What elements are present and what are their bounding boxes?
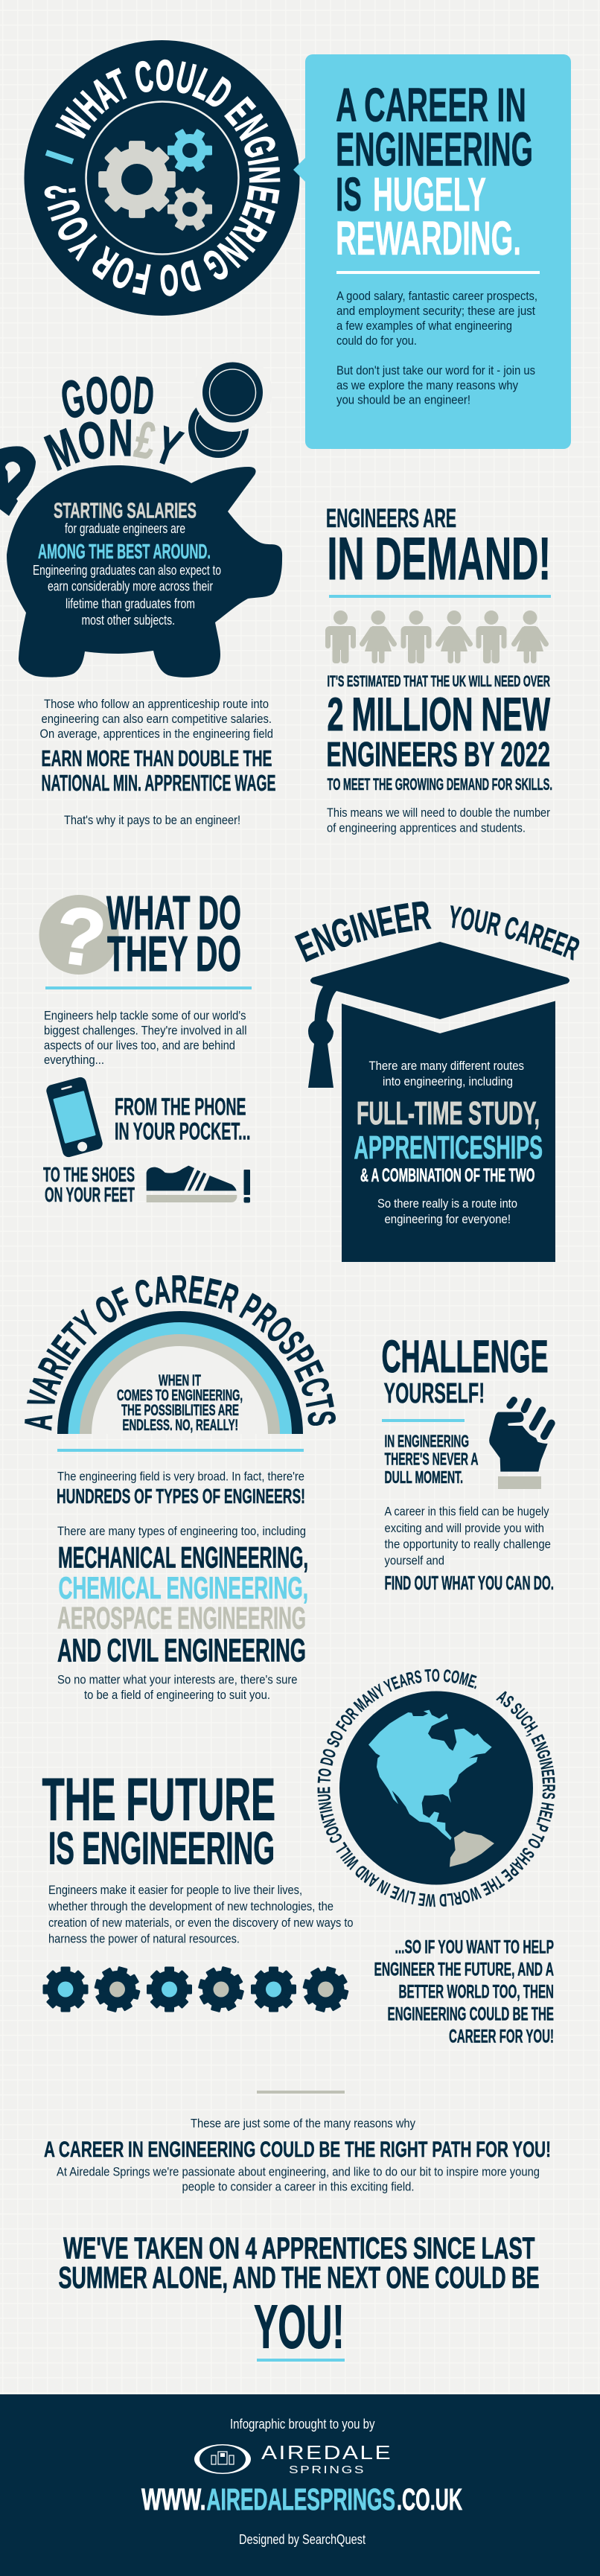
body text: [44, 1008, 247, 1067]
body text: yourself and: [384, 1553, 444, 1568]
heading: good money: MON£Y: [43, 419, 185, 471]
intro text: [336, 289, 537, 407]
panel: globe: [317, 1669, 555, 1907]
callout: apprentices: YOU!: [254, 2292, 344, 2362]
panel: a career in engineering: [293, 54, 571, 449]
curved heading: ENGINEER: [295, 901, 432, 962]
intro text: could do for you.: [336, 334, 417, 348]
curved heading: [295, 901, 579, 962]
arch text: [117, 1372, 243, 1434]
text: apprentice salaries: That's why it pays to be an engineer!: [64, 813, 240, 827]
closing text: At Airedale Springs we're passionate about engineering, and like to do our bit to inspire more young: [57, 2165, 540, 2178]
subheading: IN ENGINEERING: [384, 1431, 469, 1450]
body text: biggest challenges. They're involved in all: [44, 1023, 247, 1038]
body text: A career in this field can be hugely: [384, 1504, 549, 1519]
intro text: But don't just take our word for it - join us: [336, 363, 535, 377]
slash separator: [46, 153, 73, 162]
demand statistics: [326, 673, 552, 835]
exclamation mark: [244, 1170, 250, 1203]
fist cuff: [498, 1476, 541, 1489]
panel: engineers are in demand: [325, 504, 552, 835]
text: apprentice salaries: engineering can also earn competitive salaries.: [42, 712, 272, 726]
pig text: Engineering graduates can also expect to: [33, 563, 221, 578]
panel: the future is engineering: [42, 1766, 554, 2047]
icon: blue gear: [167, 129, 212, 172]
footer: [0, 2394, 600, 2576]
panel: challenge yourself: [381, 1331, 554, 1594]
icon: large grey gear: [98, 141, 176, 218]
rainbow arch: [57, 1311, 303, 1434]
engineering types: MECHANICAL ENGINEERING,: [58, 1541, 308, 1574]
routes text: engineering for everyone!: [384, 1212, 511, 1226]
icon: mortarboard: [308, 942, 569, 1088]
logo: airedale springs: AIREDALE: [261, 2441, 392, 2464]
routes text: There are many different routes: [369, 1059, 524, 1073]
curved heading: A VARIETY OF CAREER PROSPECTS: [25, 1275, 336, 1431]
heading: [106, 886, 241, 982]
heading: [42, 1766, 275, 1873]
closing text: These are just some of the many reasons why: [191, 2116, 415, 2131]
heading: [326, 504, 551, 593]
icon: question mark circle: ?: [50, 888, 111, 984]
subheading: THERE'S NEVER A: [384, 1449, 478, 1468]
text: apprentice salaries: NATIONAL MIN. APPRENTICE WAGE: [42, 770, 275, 796]
arch text: ENDLESS. NO, REALLY!: [122, 1417, 238, 1434]
arch text: WHEN IT: [159, 1372, 201, 1389]
pig text: AMONG THE BEST AROUND.: [38, 540, 211, 563]
engineering types: CHEMICAL ENGINEERING,: [58, 1570, 308, 1605]
heading: WHAT DO: [106, 886, 241, 940]
engineering types: So no matter what your interests are, there's sure: [57, 1672, 298, 1687]
panel: engineer your career: [295, 901, 579, 1262]
phone text: IN YOUR POCKET...: [115, 1118, 250, 1145]
heading: IS ENGINEERING: [48, 1823, 275, 1873]
body text: whether through the development of new technologies, the: [48, 1899, 333, 1913]
heading: good money: GOOD: [62, 375, 153, 418]
icon: row of gears: [43, 1962, 354, 2017]
phone text: FROM THE PHONE: [115, 1093, 246, 1120]
body text: harness the power of natural resources.: [48, 1931, 240, 1946]
arch text: THE POSSIBILITIES ARE: [121, 1402, 239, 1419]
blue gear hole: [182, 143, 197, 158]
closing text: people to consider a career in this exciting field.: [182, 2180, 414, 2193]
curved text: AS SUCH, ENGINEERS HELP TO SHAPE THE WORLD WE LIVE IN AND WILL CONTINUE TO DO SO FOR MANY YEARS TO COME.: [317, 1669, 555, 1907]
shoes text: [43, 1163, 135, 1206]
heading: IS: [336, 168, 362, 221]
pig text: earn considerably more across their: [48, 579, 213, 594]
panel body: [342, 1001, 555, 1262]
icon: globe: [339, 1692, 533, 1885]
heading: ENGINEERS ARE: [326, 504, 456, 533]
pig text: for graduate engineers are: [65, 521, 185, 536]
icon: piggy bank: [0, 446, 282, 678]
body text: everything...: [44, 1053, 104, 1067]
curved heading: YOUR CAREER: [450, 905, 579, 960]
pig text: lifetime than graduates from: [66, 596, 195, 611]
icon: people row: [325, 610, 546, 663]
heading: HUGELY: [373, 168, 486, 221]
text: apprentice salaries: [40, 697, 275, 827]
heading: YOURSELF!: [384, 1378, 485, 1409]
engineering types: AEROSPACE ENGINEERING: [57, 1601, 306, 1635]
text: apprentice salaries: On average, apprentices in the engineering field: [40, 727, 273, 741]
demand statistics: of engineering apprentices and students.: [327, 820, 526, 835]
body text: [48, 1883, 353, 1946]
body text: the opportunity to really challenge: [384, 1537, 551, 1552]
engineering types: The engineering field is very broad. In fact, there're: [57, 1470, 304, 1483]
shoes text: TO THE SHOES: [43, 1163, 135, 1186]
heading: THE FUTURE: [42, 1766, 275, 1833]
pig text: [33, 499, 221, 628]
heading: [381, 1331, 548, 1409]
engineering types: HUNDREDS OF TYPES OF ENGINEERS!: [57, 1485, 305, 1508]
heading: [336, 78, 533, 265]
text: apprentice salaries: Those who follow an apprenticeship route into: [44, 697, 269, 711]
engineering types: [57, 1470, 308, 1702]
intro text: A good salary, fantastic career prospects,: [336, 289, 537, 303]
heading: good money: [43, 375, 185, 471]
routes text: So there really is a route into: [377, 1196, 517, 1211]
intro text: and employment security; these are just: [336, 304, 535, 318]
routes text: [354, 1059, 543, 1226]
text: apprentice salaries: EARN MORE THAN DOUBLE THE: [42, 745, 272, 771]
pig text: most other subjects.: [82, 613, 175, 628]
pig text: STARTING SALARIES: [54, 499, 197, 523]
gear hole: [121, 164, 153, 195]
website: WWW.: [141, 2482, 205, 2516]
engineering types: There are many types of engineering too, including: [57, 1524, 306, 1538]
heading: THEY DO: [107, 926, 241, 982]
body text: [384, 1504, 554, 1594]
body text: Engineers make it easier for people to live their lives,: [48, 1883, 302, 1897]
body text: Engineers help tackle some of our world's: [44, 1008, 246, 1023]
icon: raised fist: [489, 1400, 552, 1472]
credit: Infographic brought to you by: [230, 2417, 375, 2432]
icon: small grey gear: [167, 188, 212, 231]
intro text: a few examples of what engineering: [336, 319, 512, 333]
body text: creation of new materials, or even the discovery of new ways to: [48, 1916, 353, 1930]
body text: aspects of our lives too, and are behind: [44, 1038, 235, 1053]
logo: airedale springs: SPRINGS: [289, 2464, 366, 2476]
designer credit: Designed by SearchQuest: [239, 2532, 366, 2547]
engineering types: to be a field of engineering to suit you.: [84, 1688, 270, 1702]
arch text: COMES TO ENGINEERING,: [117, 1387, 243, 1404]
logo: airedale springs: [194, 2441, 392, 2476]
intro text: you should be an engineer!: [336, 393, 470, 407]
routes text: into engineering, including: [383, 1074, 513, 1088]
panel: what do they do: [39, 886, 252, 1206]
icon: phone: [45, 1076, 104, 1158]
subheading: DULL MOMENT.: [384, 1467, 463, 1487]
phone text: [115, 1093, 250, 1145]
closing text: [44, 2116, 551, 2193]
icon: coins: [188, 353, 272, 458]
website: .CO.UK: [397, 2482, 462, 2516]
callout: apprentices: [58, 2231, 539, 2362]
body text: exciting and will provide you with: [384, 1521, 544, 1535]
intro text: as we explore the many reasons why: [336, 378, 518, 392]
small gear hole: [182, 202, 197, 217]
panel: a variety of career prospects: [25, 1275, 336, 1702]
subheading: [384, 1431, 478, 1487]
demand statistics: This means we will need to double the number: [327, 806, 550, 820]
icon: shoe: [147, 1166, 237, 1202]
website: AIREDALESPRINGS: [207, 2482, 395, 2516]
badge: what could engineering do for you: [24, 40, 299, 316]
callout: help engineer the future: [374, 1937, 554, 2047]
circular title: WHAT COULD ENGINEERING DO FOR YOU?: [45, 60, 280, 296]
engineering types: AND CIVIL ENGINEERING: [57, 1632, 306, 1669]
shoes text: ON YOUR FEET: [45, 1183, 135, 1206]
